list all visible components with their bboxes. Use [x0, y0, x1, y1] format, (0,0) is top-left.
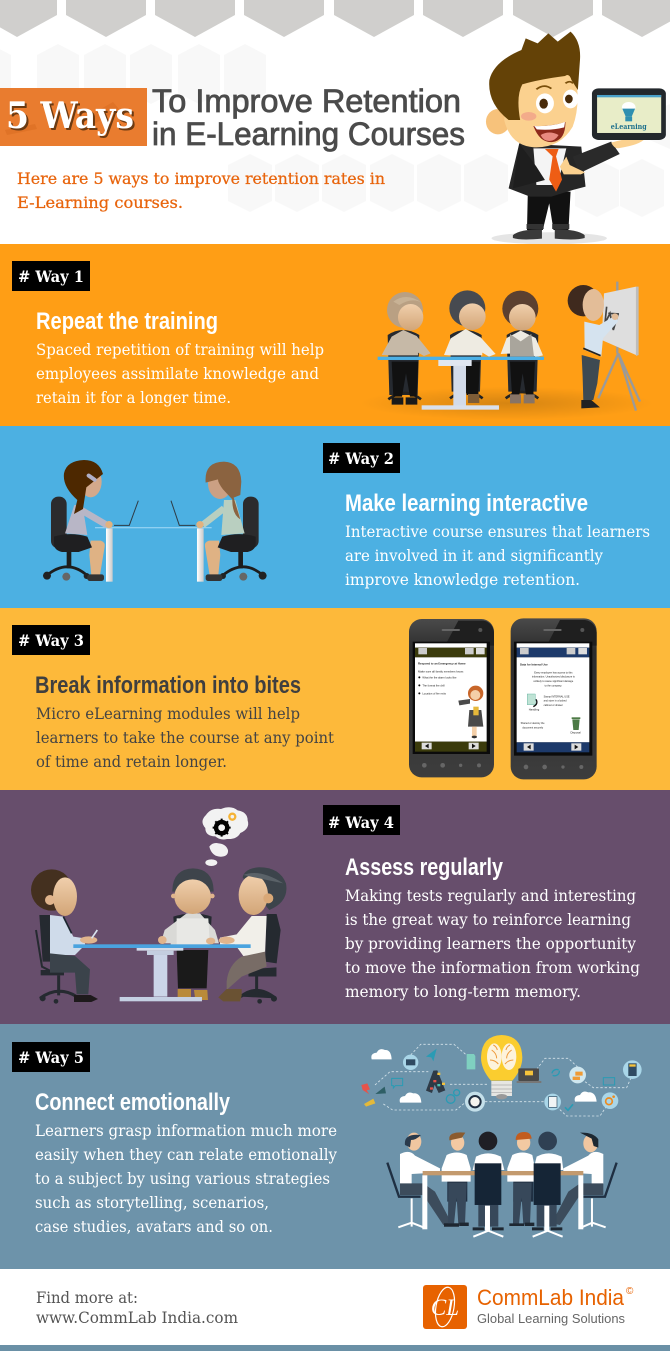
phone 2: Every employee has access to this [534, 671, 573, 674]
hand on chest [560, 157, 585, 174]
way 3 badge: # Way 3 [18, 631, 84, 650]
right person [218, 867, 286, 1004]
CommLab India logo: Global Learning Solutions [477, 1311, 625, 1326]
heads [387, 292, 423, 328]
way 2 heading: Make learning interactive [345, 490, 588, 517]
CommLab India logo: © [626, 1286, 634, 1297]
left man [400, 1152, 440, 1184]
woman avatar [468, 710, 483, 727]
phone 1: Make sure all family members know: [418, 669, 464, 673]
shirt and tie [533, 148, 566, 185]
find more text [36, 1288, 238, 1327]
face [504, 73, 578, 147]
way 3 text: Micro eLearning modules will help [36, 704, 300, 723]
suit [509, 143, 586, 197]
way 1 text: Spaced repetition of training will help [36, 340, 324, 359]
way 5 text [35, 1121, 337, 1236]
way 5 heading: Connect emotionally [35, 1089, 231, 1116]
phone 1: Respond to an Emergency at Home [418, 662, 466, 666]
illustration: idea network and team meeting [361, 1035, 642, 1237]
footer panel [0, 1269, 670, 1351]
phone 2: document securely [522, 726, 544, 729]
right man [563, 1152, 603, 1184]
way 2 text: are involved in it and significantly [345, 546, 603, 565]
light bulb with brain [481, 1035, 522, 1099]
illustration: team at table with presenter [360, 282, 653, 420]
way 3 text: of time and retain longer. [36, 752, 227, 771]
way 4 text: memory to long-term memory. [345, 982, 581, 1001]
way 5 text: Learners grasp information much more [35, 1121, 337, 1140]
panel: way 1 [0, 244, 670, 426]
eyes [536, 93, 554, 113]
CommLab India logo [423, 1285, 634, 1329]
intro text: E-Learning courses. [17, 193, 183, 212]
phone 2: and store in a locked [544, 700, 567, 703]
title: To Improve Retention [152, 83, 461, 119]
find more text: Find more at: [36, 1288, 138, 1307]
way 2 text: improve knowledge retention. [345, 570, 580, 589]
way 2 badge: # Way 2 [328, 449, 394, 468]
title: in E-Learning Courses [152, 116, 465, 152]
thought bubble [202, 807, 248, 866]
way 4 text: Making tests regularly and interesting [345, 886, 636, 905]
phone 2: information. Unauthorized disclosure is [532, 676, 575, 679]
brows [536, 82, 573, 89]
right woman [196, 462, 267, 581]
header background [0, 0, 670, 244]
way 4 text: by providing learners the opportunity [345, 934, 636, 953]
intro text [17, 169, 385, 212]
phone 2: cabinet or drawer [544, 704, 563, 707]
ear [486, 109, 510, 134]
back row team [387, 1132, 617, 1237]
way 2 text: Interactive course ensures that learners [345, 522, 650, 541]
way 1 badge [12, 261, 90, 291]
way 1 text: retain it for a longer time. [36, 388, 231, 407]
way 5 text: such as storytelling, scenarios, [35, 1193, 269, 1212]
middle person [158, 868, 219, 1000]
way 1 heading: Repeat the training [36, 308, 218, 335]
phone 1: The format fire drill [422, 683, 445, 687]
side chairs [387, 1163, 617, 1197]
way 5 text: to a subject by using various strategies [35, 1169, 330, 1188]
way 3 text: learners to take the course at any point [36, 728, 335, 747]
table [73, 944, 251, 1001]
phone 2: Stamp INTERNAL USE [544, 696, 570, 699]
panel: way 5 [0, 1024, 670, 1269]
illustration: cartoon presenter with tablet [486, 32, 666, 244]
table [95, 501, 212, 582]
illustration: three people at a meeting table [31, 807, 286, 1004]
title badge: 5 Ways [0, 88, 147, 146]
way 3 text [36, 704, 335, 771]
phone 2: to the company. [545, 684, 562, 687]
way 1 text [36, 340, 324, 407]
phone 2: Handling [529, 707, 540, 711]
way 5 text: easily when they can relate emotionally [35, 1145, 337, 1164]
way 4 text: is the great way to reinforce learning [345, 910, 631, 929]
way 3 badge [12, 625, 90, 655]
way 4 text [345, 886, 640, 1001]
legs [392, 362, 418, 397]
phone 2 [511, 618, 597, 779]
phone 2: unlikely to cause significant damage [533, 680, 574, 683]
way 4 text: to move the information from working [345, 958, 640, 977]
way 5 text: case studies, avatars and so on. [35, 1217, 273, 1236]
way 1 text: employees assimilate knowledge and [36, 364, 319, 383]
mouth [533, 122, 565, 142]
tablet [592, 88, 666, 140]
top hexagon row [0, 0, 670, 37]
way 5 badge [12, 1042, 90, 1072]
way 4 badge: # Way 4 [328, 813, 394, 832]
find more text: www.CommLab India.com [36, 1308, 238, 1327]
chairs [388, 330, 419, 395]
phone 1 [409, 619, 494, 777]
phone 1: Location of fire exits [422, 691, 447, 695]
panel: way 3 [0, 608, 670, 790]
phone 2: Data for Internal Use [520, 663, 548, 667]
way 4 badge [323, 805, 400, 835]
hair [489, 32, 580, 120]
way 5 badge: # Way 5 [18, 1048, 84, 1067]
table [378, 357, 544, 360]
panel: way 4 [0, 790, 670, 1024]
panel: way 2 [0, 426, 670, 608]
way 3 heading: Break information into bites [35, 672, 301, 699]
CommLab India logo: CL [431, 1295, 459, 1320]
presenter [582, 355, 600, 400]
easel [598, 282, 640, 411]
phone 1: What the fire alarm looks like [422, 675, 457, 679]
left woman [43, 460, 113, 581]
trousers [527, 192, 571, 230]
title badge: 5 Ways: 5 Ways [6, 95, 134, 137]
round icons [403, 1055, 642, 1112]
open hand [611, 138, 645, 148]
left person [31, 869, 98, 1004]
way 4 heading: Assess regularly [345, 854, 504, 881]
intro text: Here are 5 ways to improve retention rates in [17, 169, 385, 188]
phone 2: Shared or destroy the [521, 722, 545, 725]
CommLab India logo: CommLab India [477, 1285, 625, 1310]
way 1 badge: # Way 1 [18, 267, 84, 286]
torsos [382, 330, 431, 356]
illustration: cartoon presenter with tablet: eLearning [611, 122, 647, 131]
dashed connectors [375, 1044, 633, 1116]
front men [473, 1153, 504, 1170]
table [423, 1171, 583, 1175]
clouds [371, 1049, 597, 1103]
illustration: two smartphones [409, 618, 597, 779]
small icons [361, 1049, 615, 1110]
phone 2: Disposal [571, 730, 581, 734]
title [152, 83, 465, 152]
second-row men [447, 1165, 467, 1202]
way 2 text [345, 522, 650, 589]
illustration: two women with laptops [43, 460, 267, 582]
way 2 badge [323, 443, 400, 473]
